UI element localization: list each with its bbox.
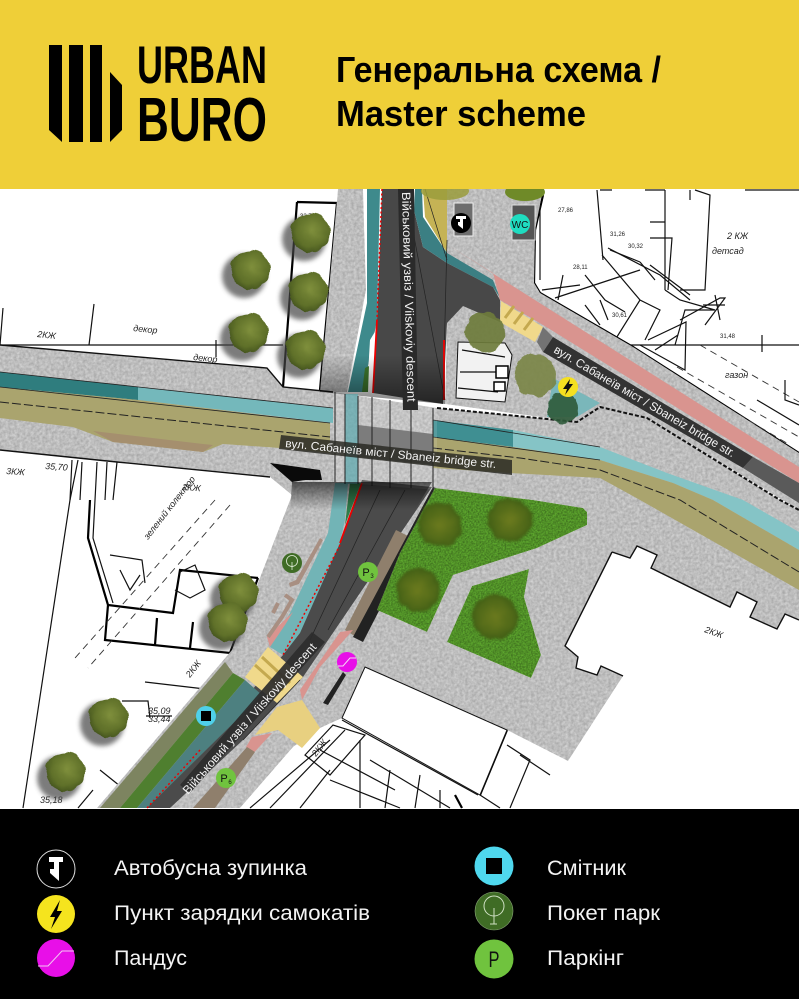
main street: carriageway: [0, 372, 799, 590]
cadastral sketch: base plan line work: 30,32: [628, 244, 644, 250]
cadastral sketch: base plan line work: 2КЖ: [702, 624, 725, 640]
paved sidewalks and plaza: [0, 189, 799, 808]
title: Master scheme: [336, 93, 586, 134]
map background: [0, 189, 799, 809]
icon: WC marker: WC: [512, 220, 528, 231]
crossing of main street and road: [333, 392, 437, 490]
cadastral sketch: base plan line work: зелений колектор: [141, 474, 197, 542]
cadastral sketch: base plan line work: декор: [193, 352, 218, 365]
underpass shadow south of the bridge: [270, 463, 432, 510]
cadastral sketch: base plan line work: 2КЖ: [181, 482, 202, 493]
shadows of the overpass on the north road: [320, 355, 445, 404]
white building footprints: [342, 667, 507, 795]
street label: Viiskoviy descent south: Військовий узвіз / Viiskoviy descent: [180, 640, 320, 797]
cadastral sketch: base plan line work: 4КЖ: [424, 715, 446, 732]
icon: trash bin marker: [196, 706, 216, 726]
legend: bus stop: Автобусна зупинка: [114, 856, 307, 880]
legend: scooter charging: [37, 895, 370, 933]
cadastral sketch: base plan line work: детсад: [712, 246, 744, 256]
cadastral sketch: base plan line work: 28,11: [573, 265, 588, 271]
cadastral sketch: base plan line work: 31,48: [720, 334, 736, 340]
header band: [0, 0, 799, 189]
stop shelters: [454, 203, 535, 240]
logo mark: [49, 45, 122, 142]
legend: parking: Паркінг: [547, 946, 624, 970]
legend: ramp: [37, 939, 187, 977]
cadastral sketch: base plan line work: 2 КЖ: [726, 231, 749, 241]
title: Генеральна схема /: [336, 49, 661, 90]
legend: parking: [474, 940, 624, 978]
cadastral sketch: base plan line work: 32,70: [300, 214, 316, 220]
cadastral sketch: base plan line work: 2КЖ: [309, 737, 329, 759]
street label: Viiskoviy descent north: Військовий узвіз / Viiskoviy descent: [399, 192, 419, 403]
cadastral sketch: base plan line work: 33,44: [148, 714, 171, 724]
cadastral sketch: base plan line work: 3КЖ: [6, 466, 26, 477]
cadastral sketch: base plan line work: 35,18: [40, 795, 63, 805]
logo wordmark: BURO: [137, 86, 267, 155]
cadastral sketch: base plan line work: декор: [133, 323, 158, 336]
lawn trees: [396, 498, 532, 640]
legend: scooter charging: Пункт зарядки самокатів: [114, 901, 370, 925]
lawn areas: [377, 488, 587, 678]
street label: Sabaneiv bridge diagonal: вул. Сабанеїв міст / Sbaneiz bridge str.: [551, 343, 738, 460]
icon: scooter charging marker: [558, 377, 578, 397]
legend: trash bin: Смітник: [547, 856, 627, 880]
legend: pocket park: [475, 892, 661, 930]
south road: lanes, paving and crossings: [100, 480, 441, 808]
trees along the streets: [37, 182, 578, 800]
cadastral sketch: base plan line work: 35,09: [148, 706, 171, 716]
icon: pocket park marker: [282, 553, 302, 573]
legend: ramp: Пандус: [114, 946, 187, 970]
icon: parking marker P3: [358, 562, 378, 582]
title: [336, 49, 661, 134]
icon: bus stop marker: [451, 213, 471, 233]
legend: bus stop: [37, 850, 307, 888]
cadastral sketch: base plan line work: [0, 190, 799, 808]
icon: parking marker P6: [216, 768, 236, 788]
upper diagonal street lanes: [537, 327, 799, 503]
cadastral sketch: base plan line work: 27,86: [558, 208, 574, 214]
cadastral sketch: base plan line work: 30,61: [612, 313, 628, 319]
icon: ramp marker: [337, 652, 357, 672]
icon: parking marker P3: P: [362, 567, 370, 579]
logo wordmark: URBAN: [137, 36, 267, 95]
icon: parking marker P3: 3: [370, 574, 374, 580]
north road: sidewalk strip, bike lane, carriageway: [348, 189, 799, 483]
legend panel: [0, 809, 799, 999]
cadastral sketch: base plan line work: 2КЖ: [36, 329, 57, 341]
icon: parking marker P6: 6: [228, 780, 232, 786]
legend: pocket park: Покет парк: [547, 901, 661, 925]
cadastral sketch: base plan line work: газон: [725, 370, 748, 380]
icon: parking marker P6: P: [220, 773, 228, 785]
road edges on the main street: [0, 345, 799, 676]
main street: bicycle lane: [0, 372, 799, 550]
legend: trash bin: [474, 846, 627, 886]
cadastral sketch: base plan line work: 2КЖ: [183, 658, 203, 680]
cadastral sketch: base plan line work: тр: [462, 364, 474, 374]
icon: WC marker: [510, 214, 530, 234]
kiosk sketch on the island: [456, 342, 512, 402]
stippled edge of the east sidewalk: [437, 407, 799, 510]
cadastral sketch: base plan line work: 35,08: [366, 678, 383, 689]
logo wordmark: [137, 36, 267, 155]
cadastral sketch: base plan line work: школа: [412, 726, 431, 740]
cadastral sketch: base plan line work: 35,70: [45, 461, 68, 473]
cadastral sketch: base plan line work: 31,26: [610, 232, 626, 238]
street label: Sabaneiv bridge main: вул. Сабанеїв міст / Sbaneiz bridge str.: [285, 438, 497, 471]
legend: parking: P: [488, 947, 500, 972]
